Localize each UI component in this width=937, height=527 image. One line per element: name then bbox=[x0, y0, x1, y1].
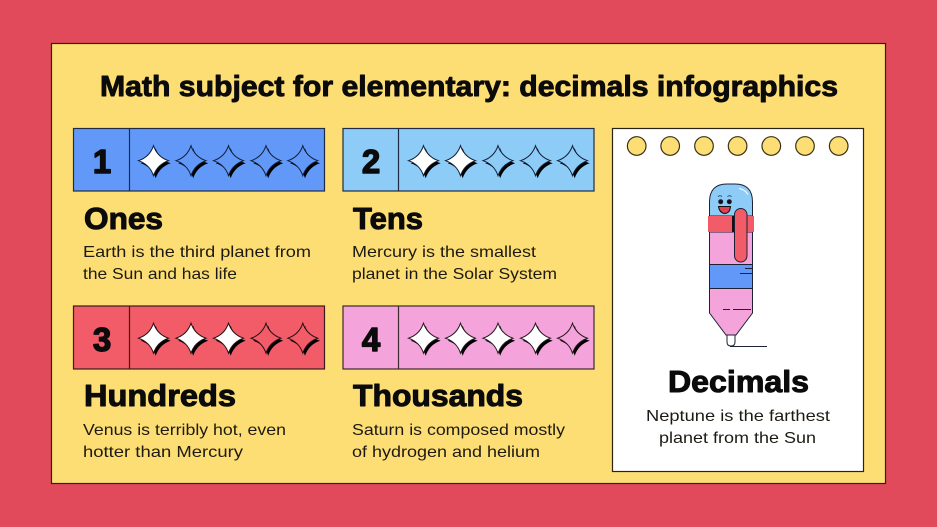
notebook description: planet from the Sun bbox=[659, 430, 816, 447]
thousands description: of hydrogen and helium bbox=[352, 444, 540, 461]
icon: smiling pen bbox=[708, 184, 767, 346]
thousands number box: 4 bbox=[362, 321, 381, 358]
tens number box: 2 bbox=[362, 143, 380, 180]
panel: notebook bbox=[612, 128, 864, 472]
ones description bbox=[83, 244, 311, 283]
ones description: Earth is the third planet from bbox=[83, 244, 311, 261]
hundreds heading: Hundreds bbox=[84, 378, 236, 413]
panel: ones bbox=[74, 128, 324, 283]
panel: hundreds bbox=[74, 306, 324, 461]
hundreds number box: 3 bbox=[93, 321, 111, 358]
ones heading: Ones bbox=[84, 201, 163, 236]
notebook description: Neptune is the farthest bbox=[646, 408, 831, 425]
hundreds description: hotter than Mercury bbox=[83, 444, 243, 461]
hundreds star rating bbox=[138, 323, 320, 356]
tens heading: Tens bbox=[353, 201, 423, 236]
title: Math subject for elementary: decimals infographics bbox=[100, 71, 838, 103]
ones star rating bbox=[138, 146, 320, 178]
hundreds description bbox=[83, 422, 286, 461]
tens star rating bbox=[408, 146, 590, 178]
notebook description bbox=[646, 408, 831, 447]
tens description: Mercury is the smallest bbox=[352, 244, 537, 261]
notebook heading: Decimals bbox=[668, 364, 809, 399]
panel: thousands bbox=[343, 306, 594, 461]
panel: tens bbox=[343, 128, 594, 283]
tens number box bbox=[343, 128, 594, 191]
tens description: planet in the Solar System bbox=[352, 266, 557, 283]
thousands description: Saturn is composed mostly bbox=[352, 422, 565, 439]
hundreds description: Venus is terribly hot, even bbox=[83, 422, 286, 439]
hundreds number box bbox=[74, 306, 324, 369]
notebook binding holes bbox=[627, 137, 848, 155]
thousands number box bbox=[343, 306, 594, 369]
thousands description bbox=[352, 422, 565, 461]
ones number box: 1 bbox=[93, 143, 111, 180]
thousands star rating bbox=[408, 323, 590, 356]
ones number box bbox=[74, 128, 324, 191]
ones description: the Sun and has life bbox=[83, 266, 237, 283]
notebook page bbox=[612, 128, 864, 472]
thousands heading: Thousands bbox=[353, 378, 523, 413]
tens description bbox=[352, 244, 557, 283]
background panel bbox=[52, 44, 886, 484]
